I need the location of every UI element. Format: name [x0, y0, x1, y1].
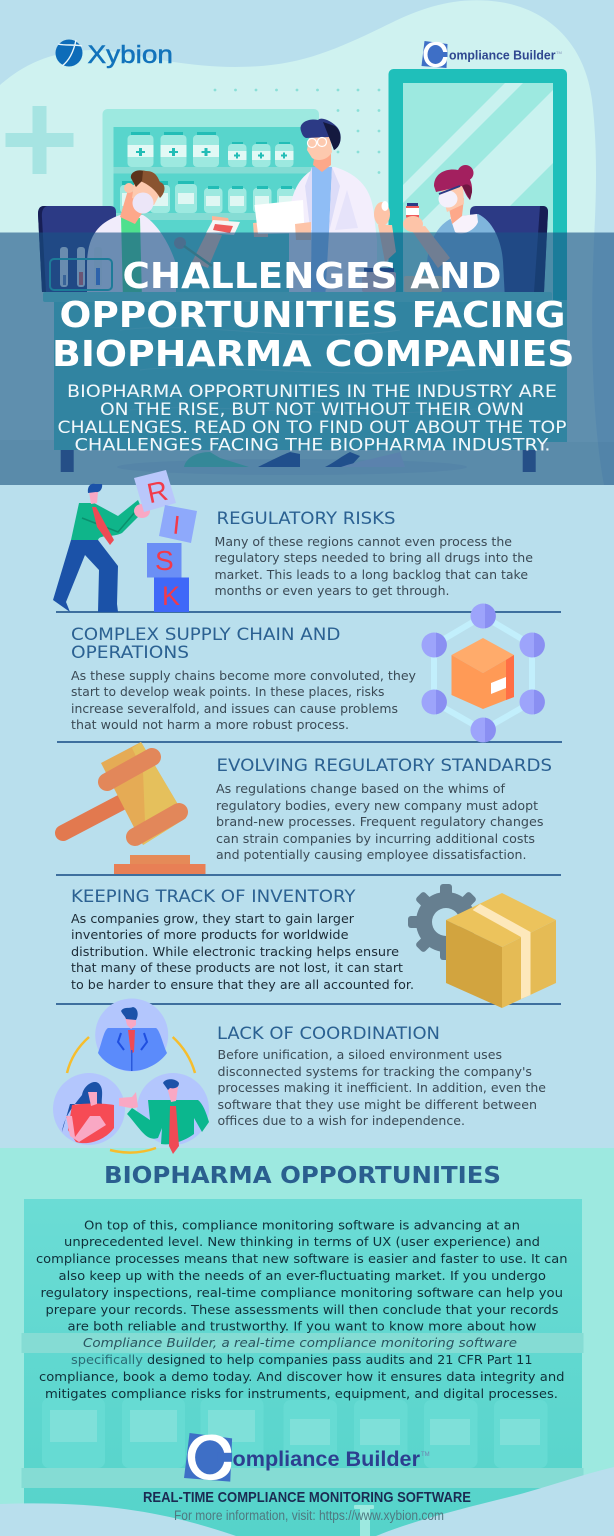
logo: Compliance Builder header	[422, 41, 562, 68]
section dividers	[56, 611, 562, 1005]
gear	[408, 884, 484, 960]
text block: opportunities paragraph: compliance, book a demo today. And discover how it ensures data integrity and	[39, 1369, 564, 1384]
title	[52, 256, 574, 375]
base	[130, 855, 190, 865]
text block: regulatory risks: market. This leads to a long backlog that can take	[214, 567, 528, 582]
logo: Xybion	[56, 40, 173, 69]
text block: opportunities paragraph: Compliance Builder, a real-time compliance monitoring software	[83, 1335, 517, 1350]
mint background blob	[0, 0, 604, 485]
text block: evolving regulatory standards: and potentially causing employee dissatisfaction.	[216, 847, 526, 862]
text block: opportunities paragraph	[36, 1218, 568, 1401]
text block: lack of coordination	[217, 1024, 546, 1128]
text block: evolving regulatory standards: can strain companies by incurring additional costs	[216, 831, 535, 846]
text block: regulatory risks: months or even years to get through.	[214, 583, 450, 598]
text block: opportunities paragraph: also keep up with the needs of an ever-fluctuating market. If you undergo	[58, 1268, 546, 1283]
logo: Compliance Builder header: ompliance Builder	[449, 48, 556, 62]
plus sign	[6, 106, 74, 174]
icon: man stacking RISK blocks	[53, 470, 197, 612]
subtitle: BIOPHARMA OPPORTUNITIES IN THE INDUSTRY ARE	[67, 382, 557, 401]
legs	[53, 540, 118, 612]
text block: lack of coordination: disconnected systems for tracking the company's	[218, 1064, 532, 1079]
ghost syringe	[354, 1505, 374, 1536]
logo: Compliance Builder footer: ompliance Builder	[232, 1447, 421, 1471]
nodes	[422, 604, 544, 742]
text block: complex supply chain: OPERATIONS	[71, 643, 189, 662]
logo: Compliance Builder footer: TM	[421, 1452, 430, 1458]
text block: evolving regulatory standards	[216, 756, 552, 862]
subtitle: ON THE RISE, BUT NOT WITHOUT THEIR OWN	[100, 400, 524, 419]
text block: evolving regulatory standards: As regulations change based on the whims of	[216, 781, 506, 796]
block K	[154, 578, 189, 612]
box	[446, 893, 556, 1008]
head	[101, 742, 186, 845]
text block: lack of coordination: LACK OF COORDINATION	[217, 1024, 440, 1043]
block S: S	[155, 545, 174, 576]
text block: opportunities paragraph: specifically	[71, 1352, 144, 1367]
text block: complex supply chain	[71, 625, 417, 732]
text block: regulatory risks: Many of these regions cannot even process the	[214, 534, 512, 549]
subtitle	[58, 382, 567, 454]
tie	[92, 507, 114, 545]
block K: K	[162, 581, 180, 611]
inner panel	[24, 1199, 582, 1536]
text block: keeping track of inventory: distribution. While electronic tracking helps ensure	[71, 944, 399, 959]
subtitle: CHALLENGES FACING THE BIOPHARMA INDUSTRY.	[74, 436, 550, 454]
chair left	[38, 206, 116, 292]
text block: regulatory risks	[214, 509, 533, 598]
text block: opportunities paragraph: designed to help companies pass audits and 21 CFR Part 11	[147, 1352, 532, 1367]
hero colour band	[0, 232, 614, 485]
text block: lack of coordination: offices due to a wish for independence.	[218, 1113, 465, 1128]
connecting arcs	[67, 1037, 195, 1153]
table bottles	[362, 268, 442, 292]
icon: gavel	[63, 742, 206, 874]
text block: regulatory risks: regulatory steps needed to bring all drugs into the	[214, 550, 533, 565]
text block: opportunities paragraph: are both reliable and trustworthy. If you want to know more about how	[68, 1318, 536, 1334]
title: OPPORTUNITIES FACING	[60, 295, 566, 336]
bottom wave left	[0, 1503, 236, 1536]
text block: keeping track of inventory: KEEPING TRACK OF INVENTORY	[71, 887, 356, 906]
block R	[134, 470, 176, 512]
scientist left	[87, 170, 240, 300]
person top	[95, 998, 168, 1072]
text block: complex supply chain: As these supply chains become more convoluted, they	[71, 668, 417, 683]
box	[452, 638, 514, 709]
ghost bottles	[42, 1398, 548, 1468]
heading: biopharma opportunities: BIOPHARMA OPPORTUNITIES	[104, 1161, 501, 1189]
text block: lack of coordination: processes making it inefficient. In addition, even the	[218, 1080, 546, 1095]
text block: complex supply chain: start to develop weak points. In these places, risks	[71, 684, 384, 699]
title: BIOPHARMA COMPANIES	[52, 334, 574, 375]
icon: three coordinating people	[53, 998, 209, 1154]
text block: lack of coordination: Before unification, a siloed environment uses	[218, 1047, 502, 1062]
website line: For more information, visit: https://www.xybion.com	[174, 1508, 444, 1523]
text block: keeping track of inventory: inventories of more products for worldwide	[71, 927, 349, 942]
text block: complex supply chain: that would not harm a more robust process.	[71, 717, 349, 732]
logo: Compliance Builder header: TM	[556, 50, 562, 55]
chair right	[470, 206, 548, 292]
bottles bottom row	[120, 181, 296, 213]
handle	[63, 802, 122, 833]
icon: package in hexagon network	[422, 604, 545, 742]
text block: opportunities paragraph: On top of this, compliance monitoring software is advancing at an	[84, 1218, 520, 1232]
text block: complex supply chain: increase severalfold, and issues can cause problems	[71, 701, 398, 716]
bands	[107, 757, 152, 782]
scientist center	[253, 119, 377, 300]
text block: opportunities paragraph: prepare your records. These assessments will then conclude that your records	[46, 1302, 558, 1317]
hero illustration: pharmacy scene	[0, 0, 614, 485]
text block: opportunities paragraph: compliance processes means that new software is easier and faster to use. It can	[36, 1251, 568, 1266]
floor	[0, 440, 614, 485]
text block: keeping track of inventory: As companies grow, they start to gain larger	[71, 911, 355, 926]
logo: Xybion: Xybion	[88, 41, 173, 69]
test tubes	[50, 247, 112, 290]
head	[89, 492, 98, 504]
hand	[134, 504, 150, 518]
text block: evolving regulatory standards: regulatory bodies, every new company must adopt	[216, 798, 538, 813]
bottom wave right	[376, 1467, 614, 1536]
text block: lack of coordination: software that they use might be different between	[218, 1097, 537, 1112]
text block: keeping track of inventory: that many of these products are not lost, it can start	[71, 960, 403, 975]
text block: evolving regulatory standards: brand-new processes. Frequent regulatory changes	[216, 814, 544, 829]
text block: opportunities paragraph: regulatory inspections, real-time compliance monitoring software can help you	[40, 1285, 563, 1300]
bottles top row	[128, 132, 294, 167]
scientist right	[374, 165, 505, 300]
text block: opportunities paragraph: unprecedented level. New thinking in terms of UX (user experience) and	[64, 1234, 540, 1249]
text block: evolving regulatory standards: EVOLVING REGULATORY STANDARDS	[216, 756, 552, 775]
text block: keeping track of inventory: to be harder to ensure that they are all accounted for.	[71, 977, 414, 992]
panel: biopharma opportunities	[0, 1148, 614, 1536]
ghost shelf bands	[22, 1333, 584, 1488]
icon: gear and cardboard box	[408, 884, 556, 1008]
shoes	[184, 452, 405, 467]
block I	[159, 505, 197, 543]
tagline: REAL-TIME COMPLIANCE MONITORING SOFTWARE	[143, 1489, 471, 1506]
block I: I	[171, 510, 182, 540]
mirror frame	[388, 69, 567, 442]
medicine shelf	[102, 109, 319, 299]
subtitle: CHALLENGES. READ ON TO FIND OUT ABOUT THE TOP	[58, 418, 567, 437]
person left	[53, 1073, 125, 1145]
text block: regulatory risks: REGULATORY RISKS	[216, 509, 396, 528]
title: CHALLENGES AND	[122, 256, 502, 297]
text block: keeping track of inventory	[71, 887, 414, 992]
torso and arm	[71, 500, 143, 540]
text block: opportunities paragraph: mitigates compliance risks for instruments, equipment, and digital processes.	[45, 1386, 558, 1401]
block S	[147, 543, 182, 578]
block R: R	[144, 475, 171, 509]
text block: complex supply chain: COMPLEX SUPPLY CHAIN AND	[71, 625, 340, 644]
icon: globe	[56, 40, 82, 66]
logo: Compliance Builder footer	[184, 1433, 430, 1482]
laboratory table and cabinet	[43, 292, 567, 472]
person right	[119, 1073, 209, 1154]
floor shadow	[117, 459, 467, 475]
dot grid	[214, 89, 380, 174]
